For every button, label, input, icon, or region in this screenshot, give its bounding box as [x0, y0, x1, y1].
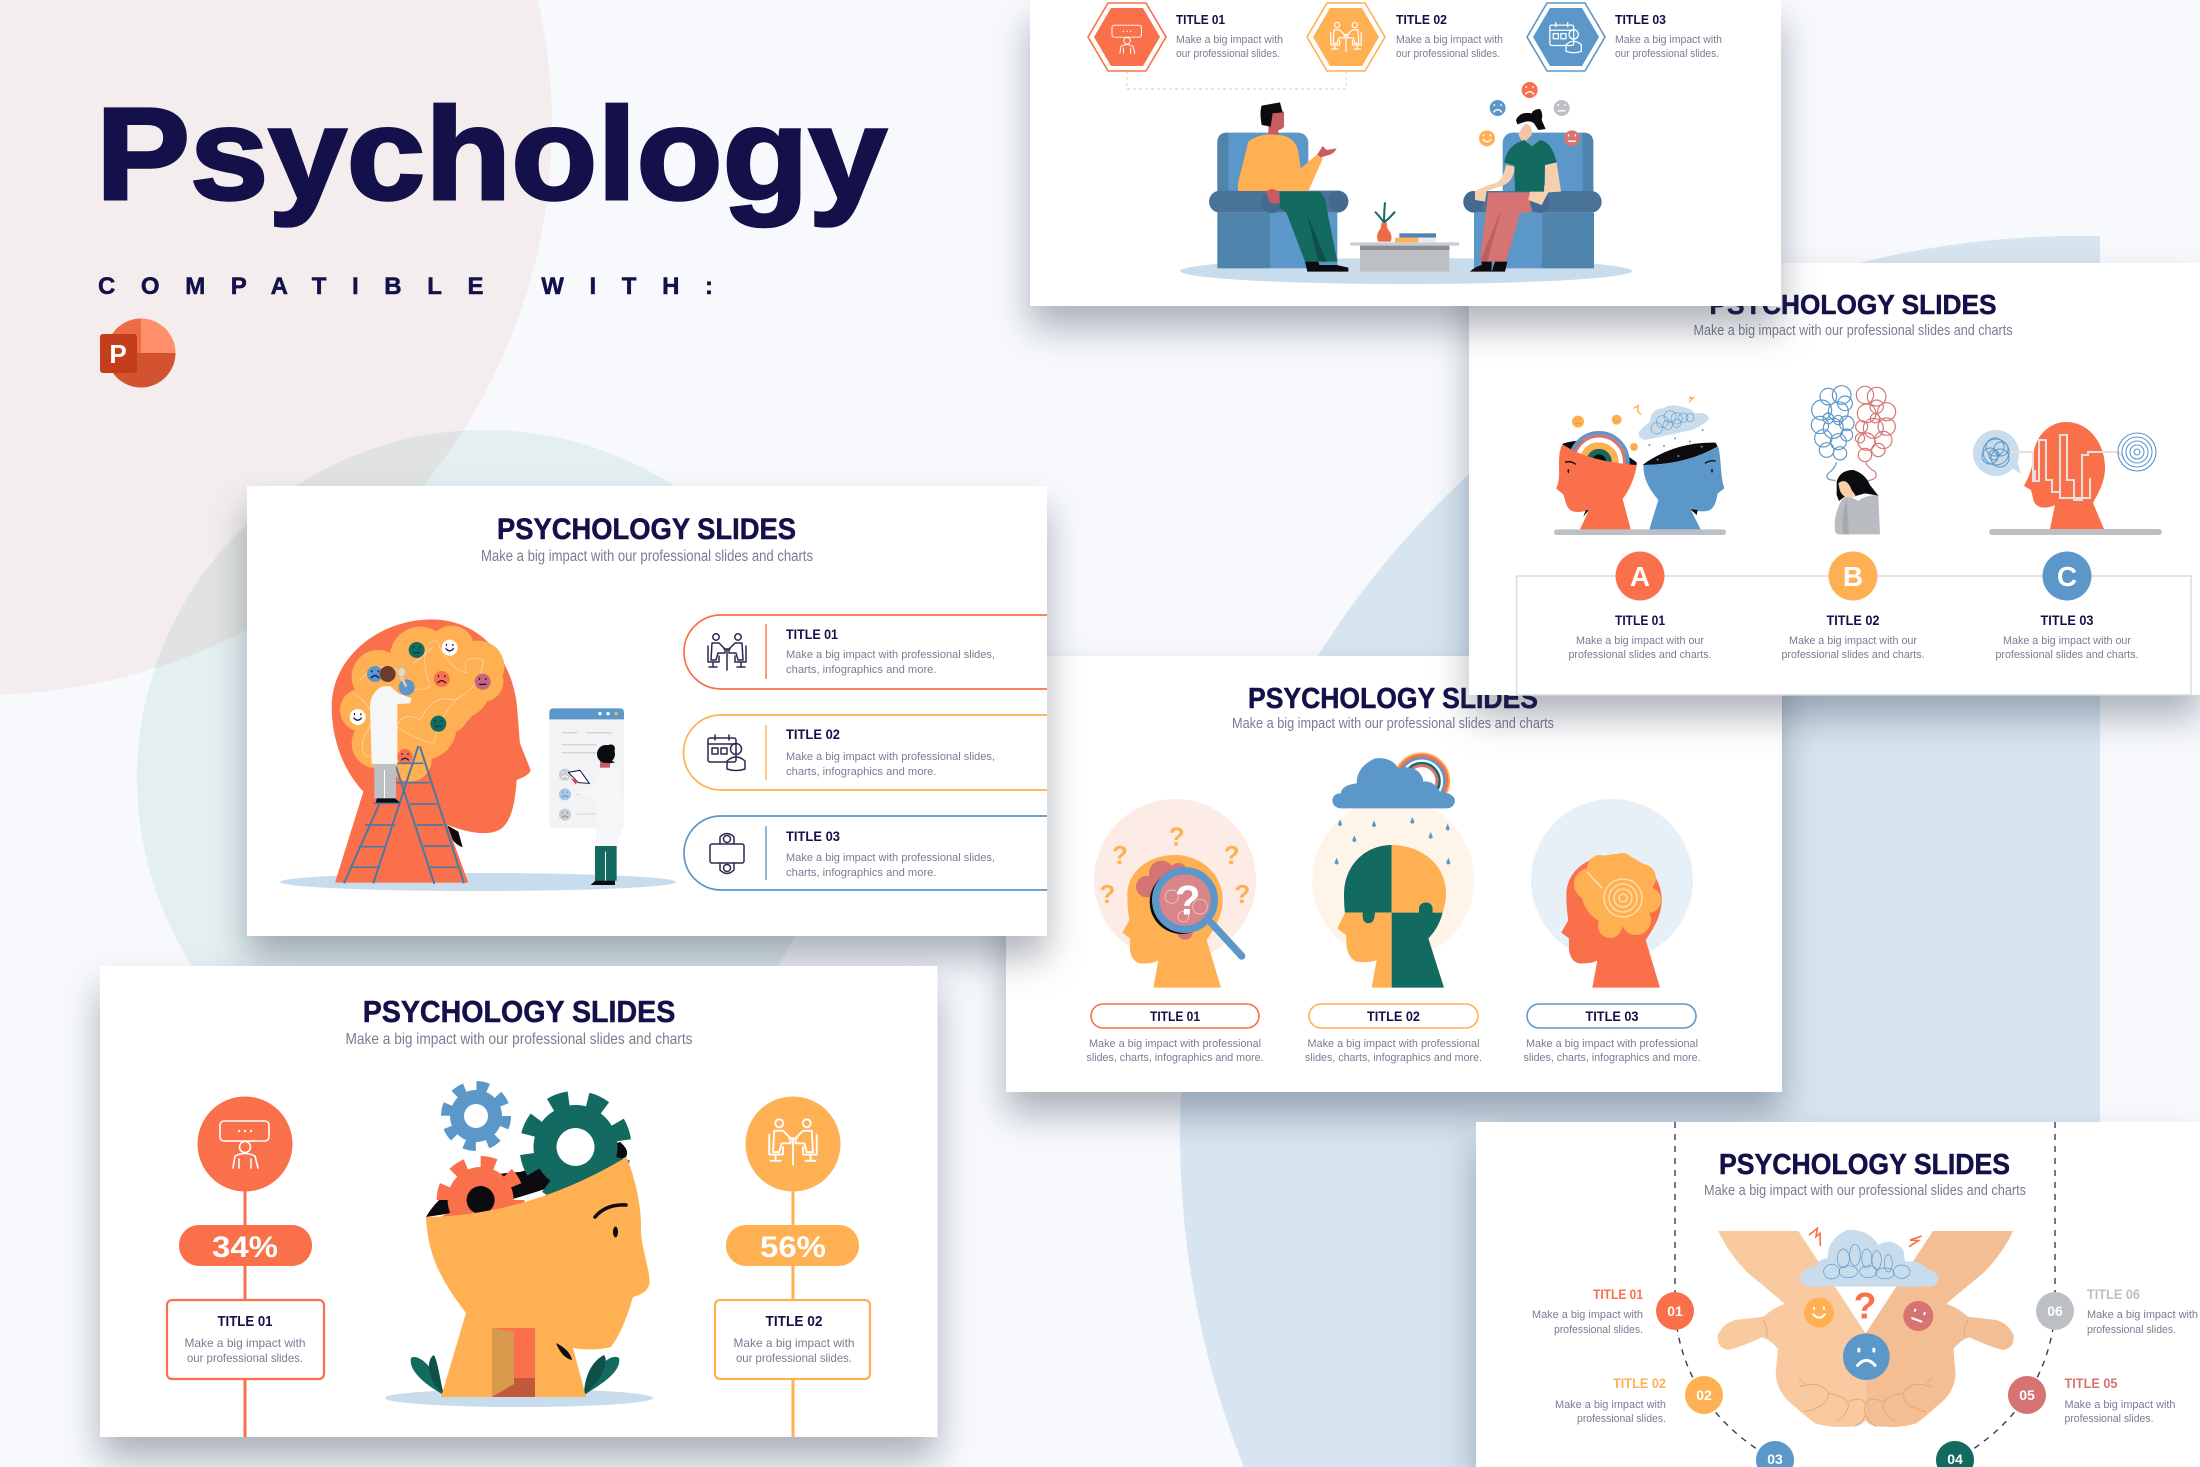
column text: [1568, 612, 2138, 661]
step 05: [2008, 1375, 2176, 1425]
left stat column: our professional slides.: [187, 1351, 303, 1365]
step 06: Make a big impact with: [2087, 1309, 2198, 1321]
illustration: magnified brain: ?: [1099, 879, 1115, 909]
pill 2: TITLE 02: [786, 726, 840, 742]
heading: PSYCHOLOGY SLIDES: [1248, 683, 1538, 715]
title pills and text: Make a big impact with professional: [1526, 1038, 1698, 1050]
step 06: TITLE 06: [2087, 1286, 2140, 1302]
column text: professional slides and charts.: [1782, 649, 1924, 661]
panel: head investigation with pills: [247, 486, 1047, 936]
illustration: therapist and patient on chairs: [1180, 82, 1632, 284]
hexagon 3 with text: our professional slides.: [1615, 48, 1719, 60]
outline box: [1516, 576, 2191, 695]
dashed connector: [1127, 71, 1346, 89]
pill 3: [684, 816, 1047, 890]
pill 2: [684, 715, 1047, 790]
panel: hands and numbered steps: [1476, 1122, 2200, 1467]
pill 1: TITLE 01: [786, 626, 838, 642]
title pills and text: Make a big impact with professional: [1308, 1038, 1480, 1050]
step 01: TITLE 01: [1593, 1286, 1643, 1302]
illustration: head with gears: [385, 1086, 653, 1407]
column text: TITLE 02: [1826, 612, 1880, 628]
hexagon 2 with text: Make a big impact with: [1396, 34, 1503, 46]
pill 1: charts, infographics and more.: [786, 664, 936, 676]
step 05: TITLE 05: [2064, 1375, 2118, 1391]
subheading: Make a big impact with our professional slides and charts: [481, 548, 813, 565]
right stat column: [715, 1096, 870, 1437]
illustration: puzzle head with rain cloud: [1312, 754, 1474, 988]
pill 2: charts, infographics and more.: [786, 766, 936, 778]
dashed timeline: [1675, 1122, 2055, 1460]
step 06: [2036, 1286, 2198, 1336]
title pills and text: Make a big impact with professional: [1089, 1038, 1261, 1050]
hexagon 3 with text: TITLE 03: [1615, 12, 1666, 27]
badge A: [1616, 552, 1664, 600]
subheading: Make a big impact with our professional slides and charts: [1704, 1182, 2026, 1199]
panel: gears head with percentages: [100, 966, 938, 1437]
pill 1: [684, 615, 1047, 689]
title pills and text: TITLE 03: [1586, 1008, 1639, 1024]
left stat column: Make a big impact with: [184, 1336, 306, 1350]
hexagon 1 with text: Make a big impact with: [1176, 34, 1283, 46]
title pills and text: TITLE 01: [1150, 1008, 1200, 1024]
hexagon 2 with text: our professional slides.: [1396, 48, 1500, 60]
step 03: 03: [1767, 1451, 1783, 1467]
step 02: [1555, 1375, 1723, 1425]
pill 3: TITLE 03: [786, 828, 840, 844]
title pills and text: slides, charts, infographics and more.: [1305, 1052, 1482, 1064]
illustration: tangled brain and distressed woman: [1811, 386, 1896, 534]
step 01: professional slides.: [1554, 1324, 1643, 1336]
column text: TITLE 03: [2040, 612, 2094, 628]
illustration: spiral brain head: [1531, 799, 1693, 988]
heading: PSYCHOLOGY SLIDES: [1710, 289, 1996, 320]
heading: PSYCHOLOGY SLIDES: [497, 513, 796, 546]
subheading: Make a big impact with our professional slides and charts: [1694, 322, 2012, 339]
step 05: 05: [2019, 1387, 2035, 1403]
hexagon 1 with text: [1088, 3, 1283, 71]
illustration: hands holding emotions: ?: [1854, 1284, 1876, 1326]
hexagon 3 with text: Make a big impact with: [1615, 34, 1722, 46]
column text: TITLE 01: [1615, 612, 1665, 628]
right stat column: 56%: [760, 1231, 826, 1264]
step 06: 06: [2047, 1303, 2063, 1319]
right stat column: our professional slides.: [736, 1351, 852, 1365]
pill 3: charts, infographics and more.: [786, 867, 936, 879]
hexagon 1 with text: our professional slides.: [1176, 48, 1280, 60]
hexagon 2 with text: TITLE 02: [1396, 12, 1447, 27]
step 04: 04: [1947, 1451, 1963, 1467]
left stat column: [167, 1096, 324, 1437]
step 02: Make a big impact with: [1555, 1399, 1666, 1411]
icon: PowerPoint logo: [100, 318, 176, 388]
heading: PSYCHOLOGY SLIDES: [1719, 1149, 2010, 1181]
panel: three heads: [1006, 656, 1782, 1092]
hexagon 2 with text: [1307, 3, 1503, 71]
illustration: maze head: [1973, 422, 2162, 535]
title pills and text: [1086, 1004, 1700, 1064]
icon: PowerPoint logo: P: [109, 339, 127, 369]
main title: Psychology: [96, 80, 887, 227]
illustration: magnified brain: ?: [1112, 840, 1128, 870]
column text: professional slides and charts.: [1568, 649, 1712, 661]
column text: Make a big impact with our: [2003, 635, 2131, 647]
column text: professional slides and charts.: [1996, 649, 2138, 661]
badge C: C: [2057, 561, 2077, 592]
title pills and text: slides, charts, infographics and more.: [1524, 1052, 1700, 1064]
step 04: [1936, 1441, 1974, 1467]
pill 2: Make a big impact with professional slides,: [786, 751, 995, 763]
pill 3: Make a big impact with professional slides,: [786, 852, 995, 864]
illustration: magnified brain: ?: [1224, 840, 1240, 870]
step 05: Make a big impact with: [2064, 1399, 2176, 1411]
hexagon 1 with text: TITLE 01: [1176, 12, 1225, 27]
right stat column: Make a big impact with: [734, 1336, 854, 1350]
illustration: head with scientist on ladder: [280, 619, 676, 891]
step 02: 02: [1696, 1387, 1712, 1403]
step 01: Make a big impact with: [1532, 1309, 1643, 1321]
right stat column: TITLE 02: [766, 1313, 822, 1330]
step 02: TITLE 02: [1613, 1375, 1666, 1391]
pill 1: Make a big impact with professional slides,: [786, 649, 995, 661]
step 01: [1532, 1286, 1694, 1336]
illustration: magnified brain: ?: [1169, 822, 1185, 852]
title pills and text: slides, charts, infographics and more.: [1086, 1052, 1264, 1064]
hexagon 3 with text: [1527, 3, 1722, 71]
illustration: magnified brain: ?: [1175, 877, 1200, 924]
badge B: [1828, 552, 1878, 600]
column text: Make a big impact with our: [1576, 635, 1704, 647]
panel: therapy session: [1030, 0, 1781, 306]
title pills and text: TITLE 02: [1367, 1008, 1420, 1024]
panel: A B C heads: [1469, 263, 2200, 695]
step 01: 01: [1667, 1303, 1683, 1319]
compatible with label: COMPATIBLE WITH:: [98, 273, 713, 300]
left stat column: TITLE 01: [218, 1313, 272, 1330]
heading: PSYCHOLOGY SLIDES: [363, 994, 675, 1029]
step 02: professional slides.: [1577, 1413, 1666, 1425]
subheading: Make a big impact with our professional slides and charts: [1232, 715, 1554, 732]
column text: Make a big impact with our: [1789, 635, 1917, 647]
illustration: hands holding emotions: [1718, 1228, 2014, 1427]
badge B: B: [1843, 561, 1863, 592]
badge C: [2042, 552, 2092, 600]
step 05: professional slides.: [2064, 1413, 2154, 1425]
illustration: magnified brain: ?: [1234, 879, 1250, 909]
left stat column: 34%: [212, 1231, 278, 1264]
badge A: A: [1630, 561, 1650, 592]
step 06: professional slides.: [2087, 1324, 2176, 1336]
illustration: open heads with rainbow and rain cloud: [1554, 396, 1726, 535]
step 03: [1756, 1441, 1794, 1467]
illustration: magnified brain: [1094, 799, 1256, 988]
subheading: Make a big impact with our professional slides and charts: [346, 1031, 692, 1048]
